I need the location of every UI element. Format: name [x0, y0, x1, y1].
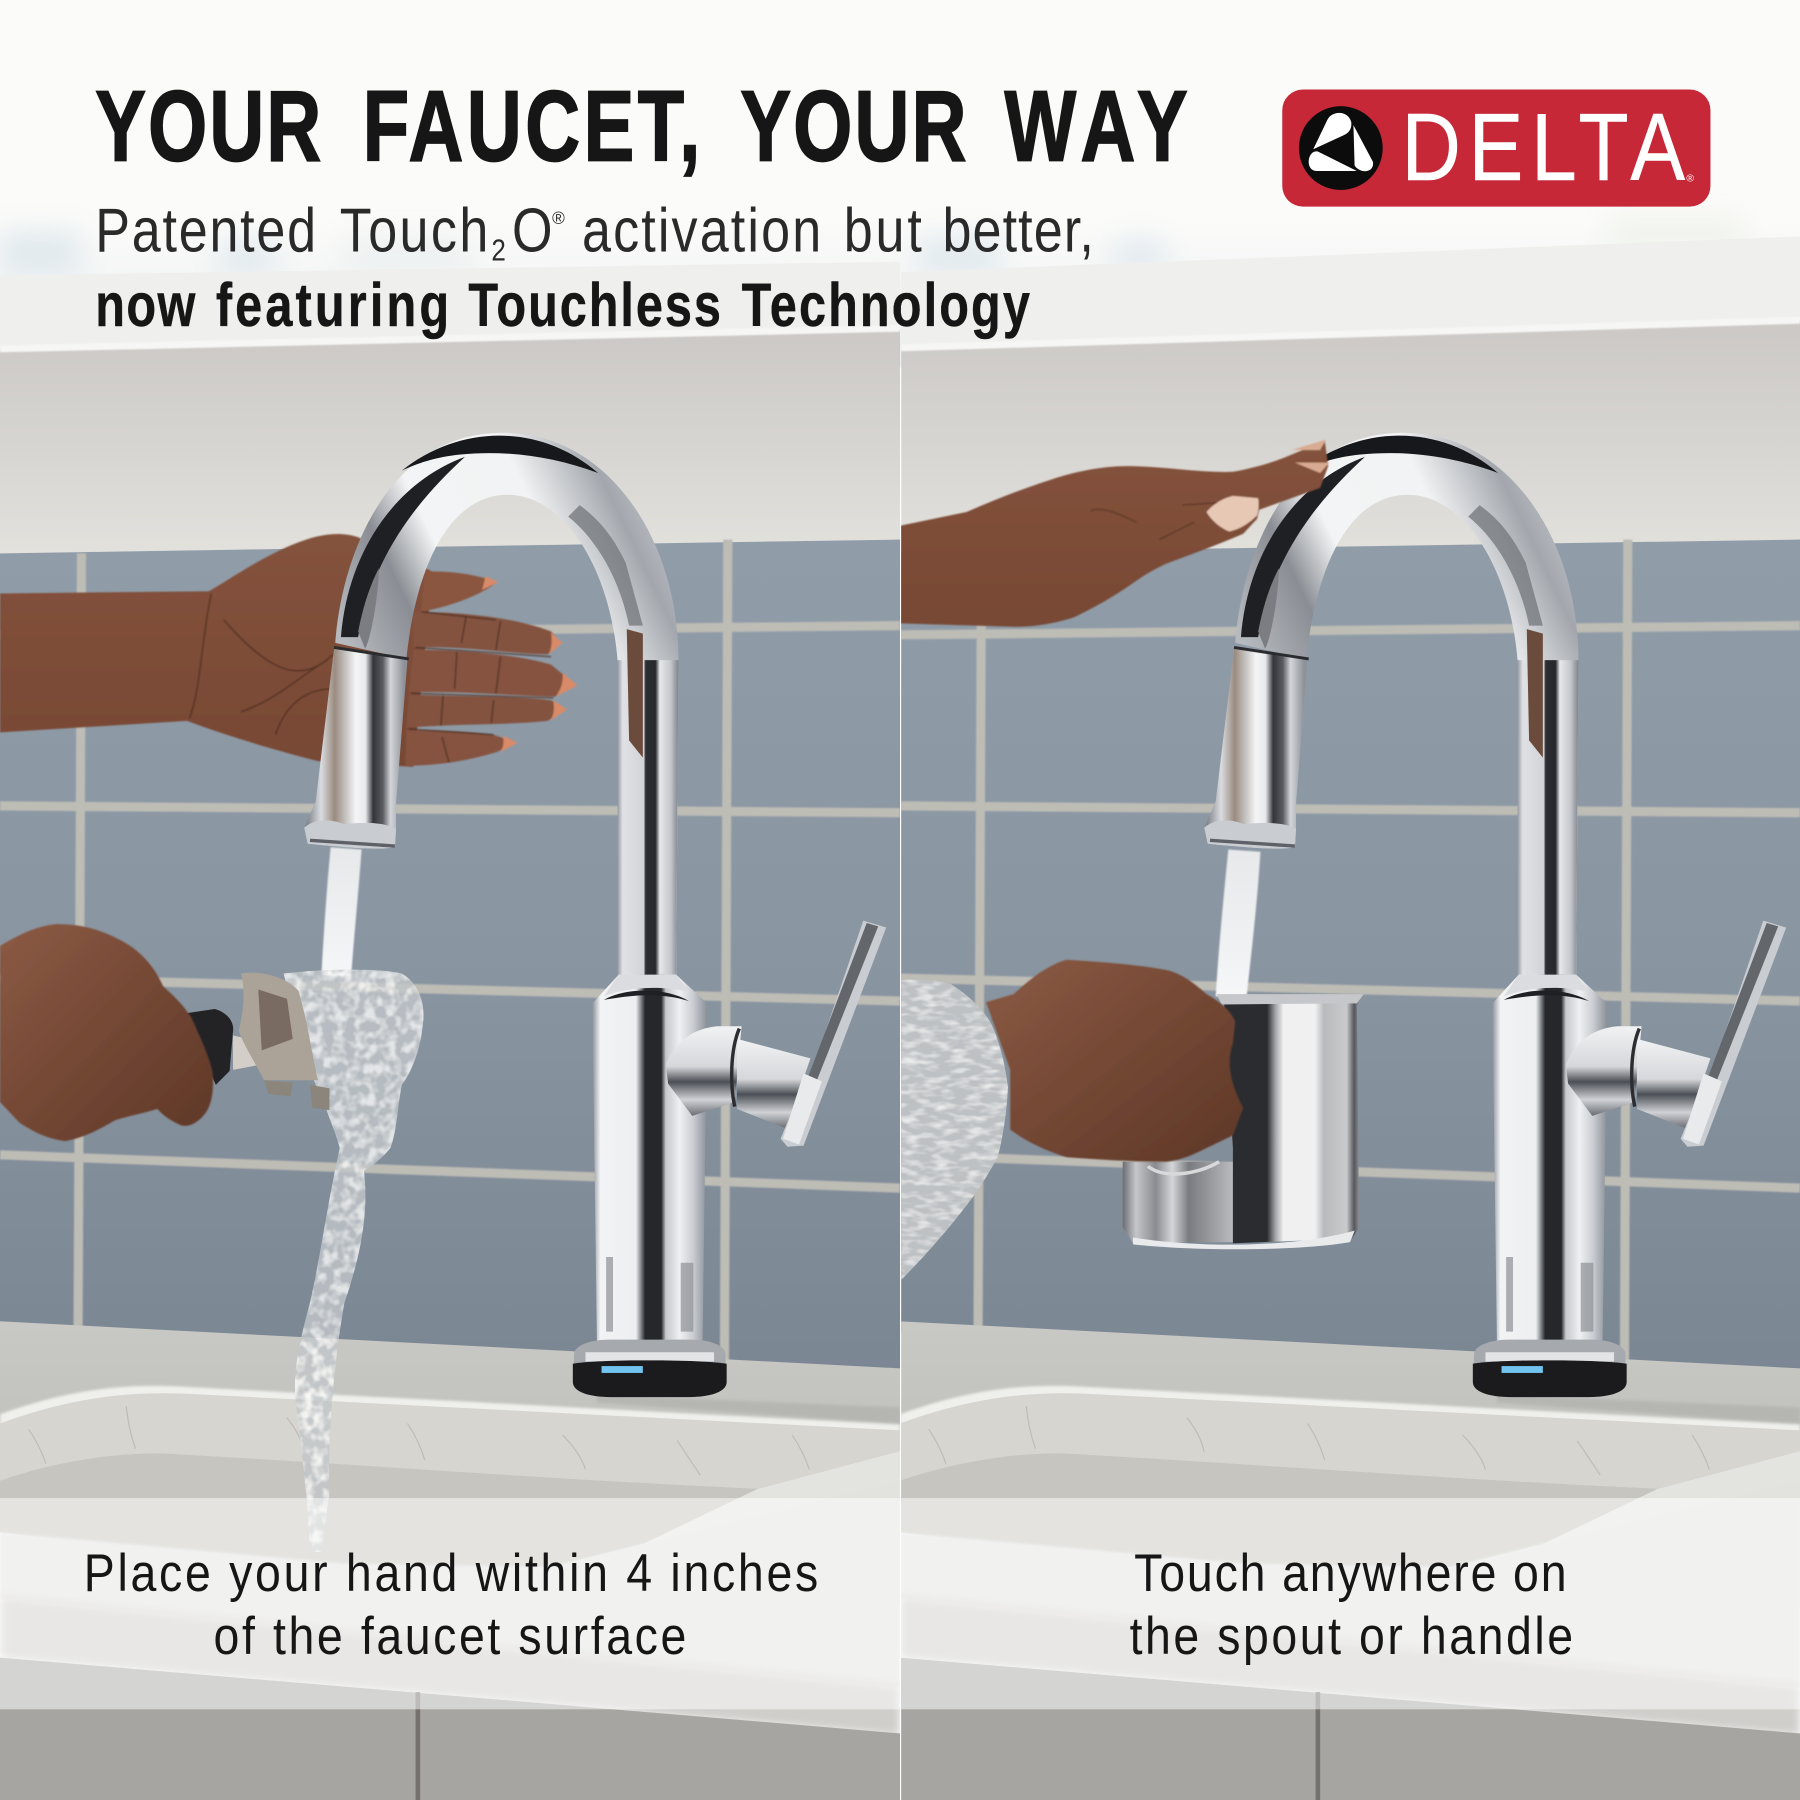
- gooseneck spout: [335, 433, 678, 976]
- tile backsplash: [0, 540, 900, 1378]
- caption: left panel: [84, 1543, 818, 1666]
- faucet repeated: [1204, 433, 1786, 1397]
- knit sweater cuff: [901, 979, 1008, 1280]
- caption: right panel: [1130, 1543, 1573, 1666]
- title: [95, 71, 1188, 182]
- caption band right: [901, 1498, 1800, 1709]
- caption: left panel: Place your hand within 4 inches: [84, 1543, 818, 1603]
- subtitle line one: ®: [552, 208, 565, 228]
- scene: tile backsplash, counter and cabinet: [0, 540, 900, 1800]
- subtitle line one: better,: [942, 196, 1094, 265]
- subtitle line two: now: [95, 271, 196, 339]
- hand hovering behind faucet: [0, 534, 577, 767]
- title: FAUCET,: [363, 71, 700, 182]
- subtitle line one: O: [512, 196, 552, 265]
- subtitle line one: Touch: [340, 196, 488, 265]
- panel: hands-free sensing scene: [0, 262, 900, 1800]
- subtitle line two: featuring: [216, 271, 449, 339]
- side handle: [666, 921, 886, 1147]
- cabinet doors: [0, 1658, 900, 1800]
- subtitle line one: 2: [491, 234, 506, 268]
- background: window glow: [0, 0, 1800, 367]
- pull-down spray head: [304, 647, 409, 849]
- upper wall ledge and cabinet underside: [0, 262, 900, 553]
- faucet: [304, 433, 886, 1397]
- riser body: [592, 975, 707, 1343]
- subtitle line two: Touchless: [468, 271, 721, 339]
- water over portafilter with stream to sink: [284, 970, 423, 1552]
- caption band left: [0, 1498, 900, 1709]
- title: YOUR: [740, 71, 966, 182]
- caption: right panel: Touch anywhere on: [1134, 1543, 1567, 1603]
- caption: left panel: of the faucet surface: [214, 1606, 686, 1666]
- subtitle line two: [95, 271, 1030, 339]
- subtitle line one: but: [844, 196, 922, 265]
- title: YOUR: [95, 71, 321, 182]
- hand holding portafilter: [0, 924, 329, 1141]
- water stream into cup: [1216, 849, 1260, 996]
- panel: touch activation scene: [900, 236, 1800, 1800]
- subtitle line two: Technology: [742, 271, 1030, 339]
- fist: [0, 924, 213, 1141]
- countertop: [0, 1321, 900, 1736]
- upper wall ledge and cabinet underside: [901, 236, 1800, 556]
- subtitle line one: Patented: [95, 196, 316, 265]
- portafilter: [184, 973, 329, 1110]
- stainless cup: [1123, 994, 1364, 1249]
- title: WAY: [1004, 71, 1188, 182]
- logo: Delta: [1282, 90, 1710, 207]
- subtitle line one: activation: [582, 196, 821, 265]
- wordmark: DELTA: [1402, 94, 1686, 201]
- logo: Delta: ®: [1686, 173, 1694, 184]
- icon: Delta emblem: [1299, 106, 1383, 190]
- hand holding cup: [986, 960, 1243, 1162]
- subtitle line one: [95, 196, 1094, 268]
- caption: right panel: the spout or handle: [1130, 1606, 1573, 1666]
- hand touching spout: [900, 440, 1329, 627]
- water stream from spray head: [321, 847, 362, 976]
- scene repeated: tile, counter, cabinet: [900, 540, 1800, 1800]
- base with status light: [573, 1340, 727, 1397]
